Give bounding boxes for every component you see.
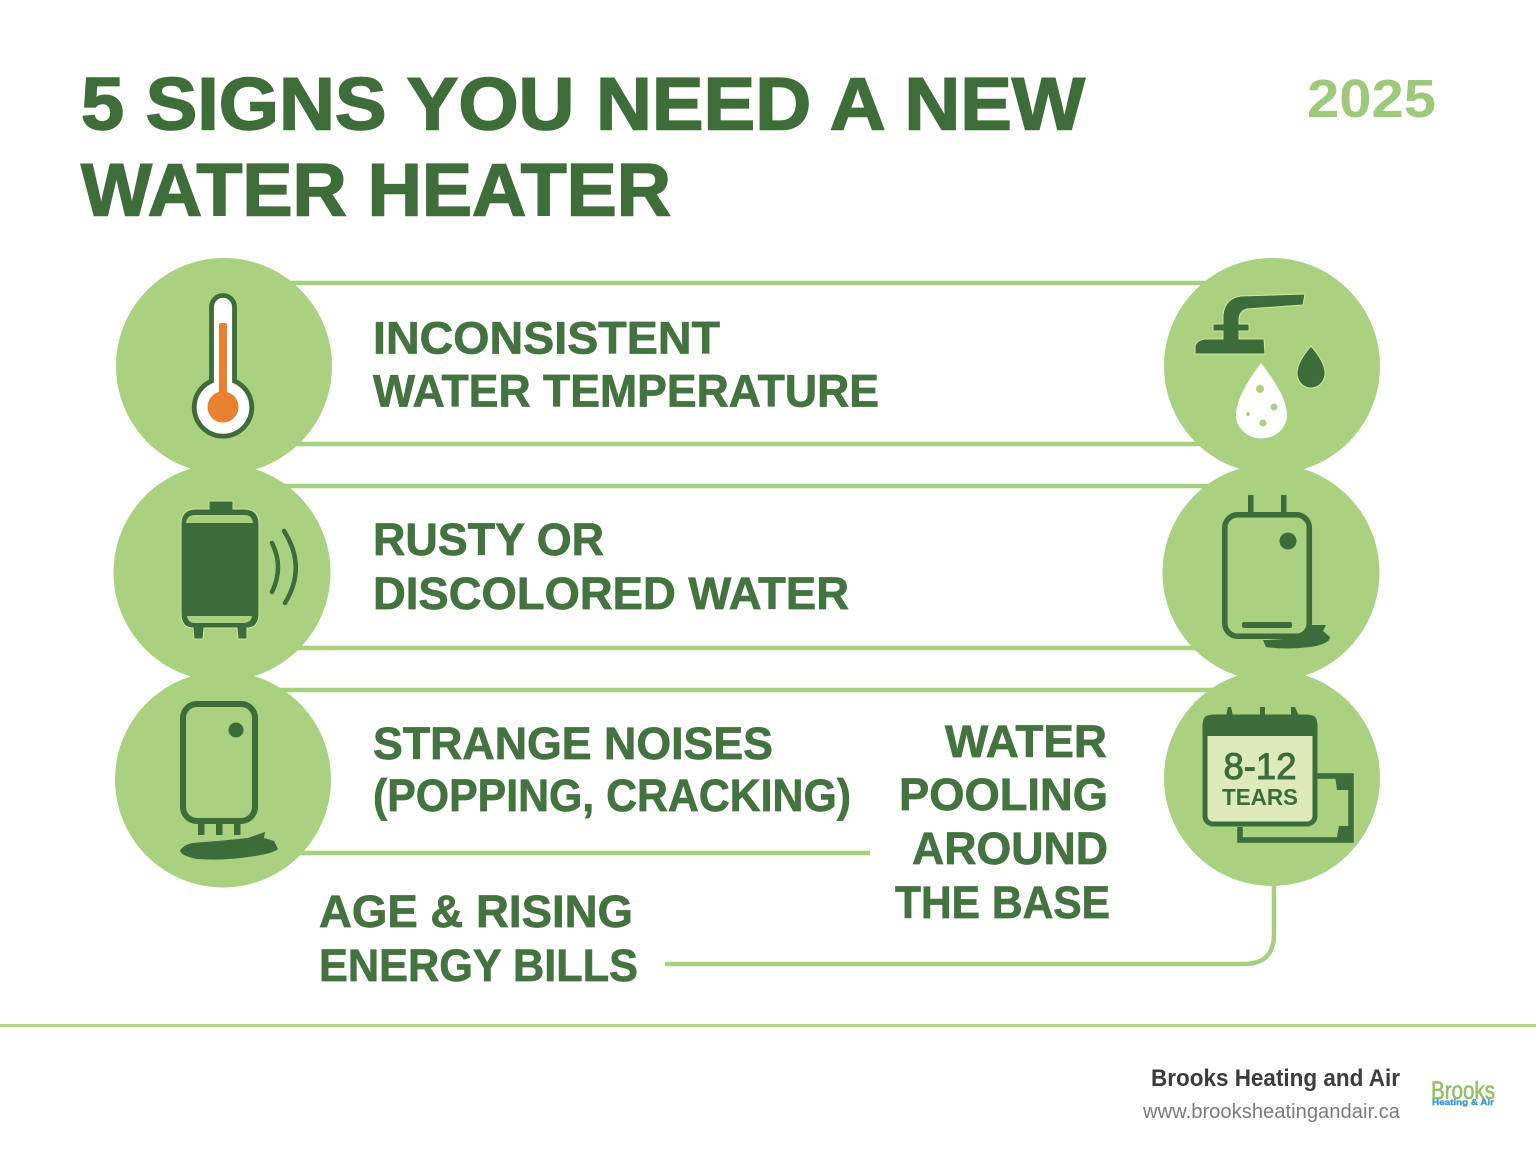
label: water pooling around the base: AROUND xyxy=(912,823,1108,874)
title: 5 SIGNS YOU NEED A NEW xyxy=(81,62,1085,146)
footer divider xyxy=(0,1024,1536,1027)
footer company name and website xyxy=(1142,1065,1401,1123)
icon: water heater leaking xyxy=(1225,495,1330,648)
footer company name and website: Brooks Heating and Air xyxy=(1151,1065,1400,1092)
label: rusty or discolored water xyxy=(373,514,849,619)
row connector lines xyxy=(270,283,1274,964)
title: WATER HEATER xyxy=(81,148,671,232)
label: age and rising energy bills: ENERGY BILLS xyxy=(319,940,638,991)
label: inconsistent water temperature xyxy=(373,312,879,416)
footer logo: Heating & Air xyxy=(1432,1098,1494,1107)
label: water pooling around the base: THE BASE xyxy=(895,877,1110,928)
label: strange noises: STRANGE NOISES xyxy=(373,718,773,769)
icon: dripping faucet xyxy=(1195,294,1325,438)
label: rusty or discolored water: DISCOLORED WATER xyxy=(373,568,849,619)
label: strange noises: (POPPING, CRACKING) xyxy=(373,770,851,821)
icon: calendar 8-12 tears: TEARS xyxy=(1222,784,1298,810)
title xyxy=(81,62,1085,232)
icon: thermometer xyxy=(194,296,252,436)
icon circle backgrounds xyxy=(114,258,1380,888)
label: age and rising energy bills xyxy=(319,886,638,991)
label: age and rising energy bills: AGE & RISING xyxy=(319,886,633,937)
icon: calendar 8-12 tears: 8-12 xyxy=(1224,746,1296,787)
label: water pooling around the base xyxy=(895,716,1110,928)
footer company name and website: www.brooksheatingandair.ca xyxy=(1142,1101,1401,1123)
icon: water heater with sound waves xyxy=(181,501,296,639)
icon: water heater with puddle xyxy=(180,704,278,860)
label: water pooling around the base: WATER xyxy=(945,716,1107,767)
icon: calendar 8-12 tears xyxy=(1203,707,1353,842)
label: water pooling around the base: POOLING xyxy=(899,769,1108,820)
label: strange noises xyxy=(373,718,851,821)
year label: 2025 xyxy=(1307,69,1436,129)
footer logo: Brooks xyxy=(1431,1077,1495,1105)
label: inconsistent water temperature: WATER TEMPERATURE xyxy=(373,366,879,416)
label: rusty or discolored water: RUSTY OR xyxy=(373,514,604,565)
label: inconsistent water temperature: INCONSISTENT xyxy=(373,312,720,364)
